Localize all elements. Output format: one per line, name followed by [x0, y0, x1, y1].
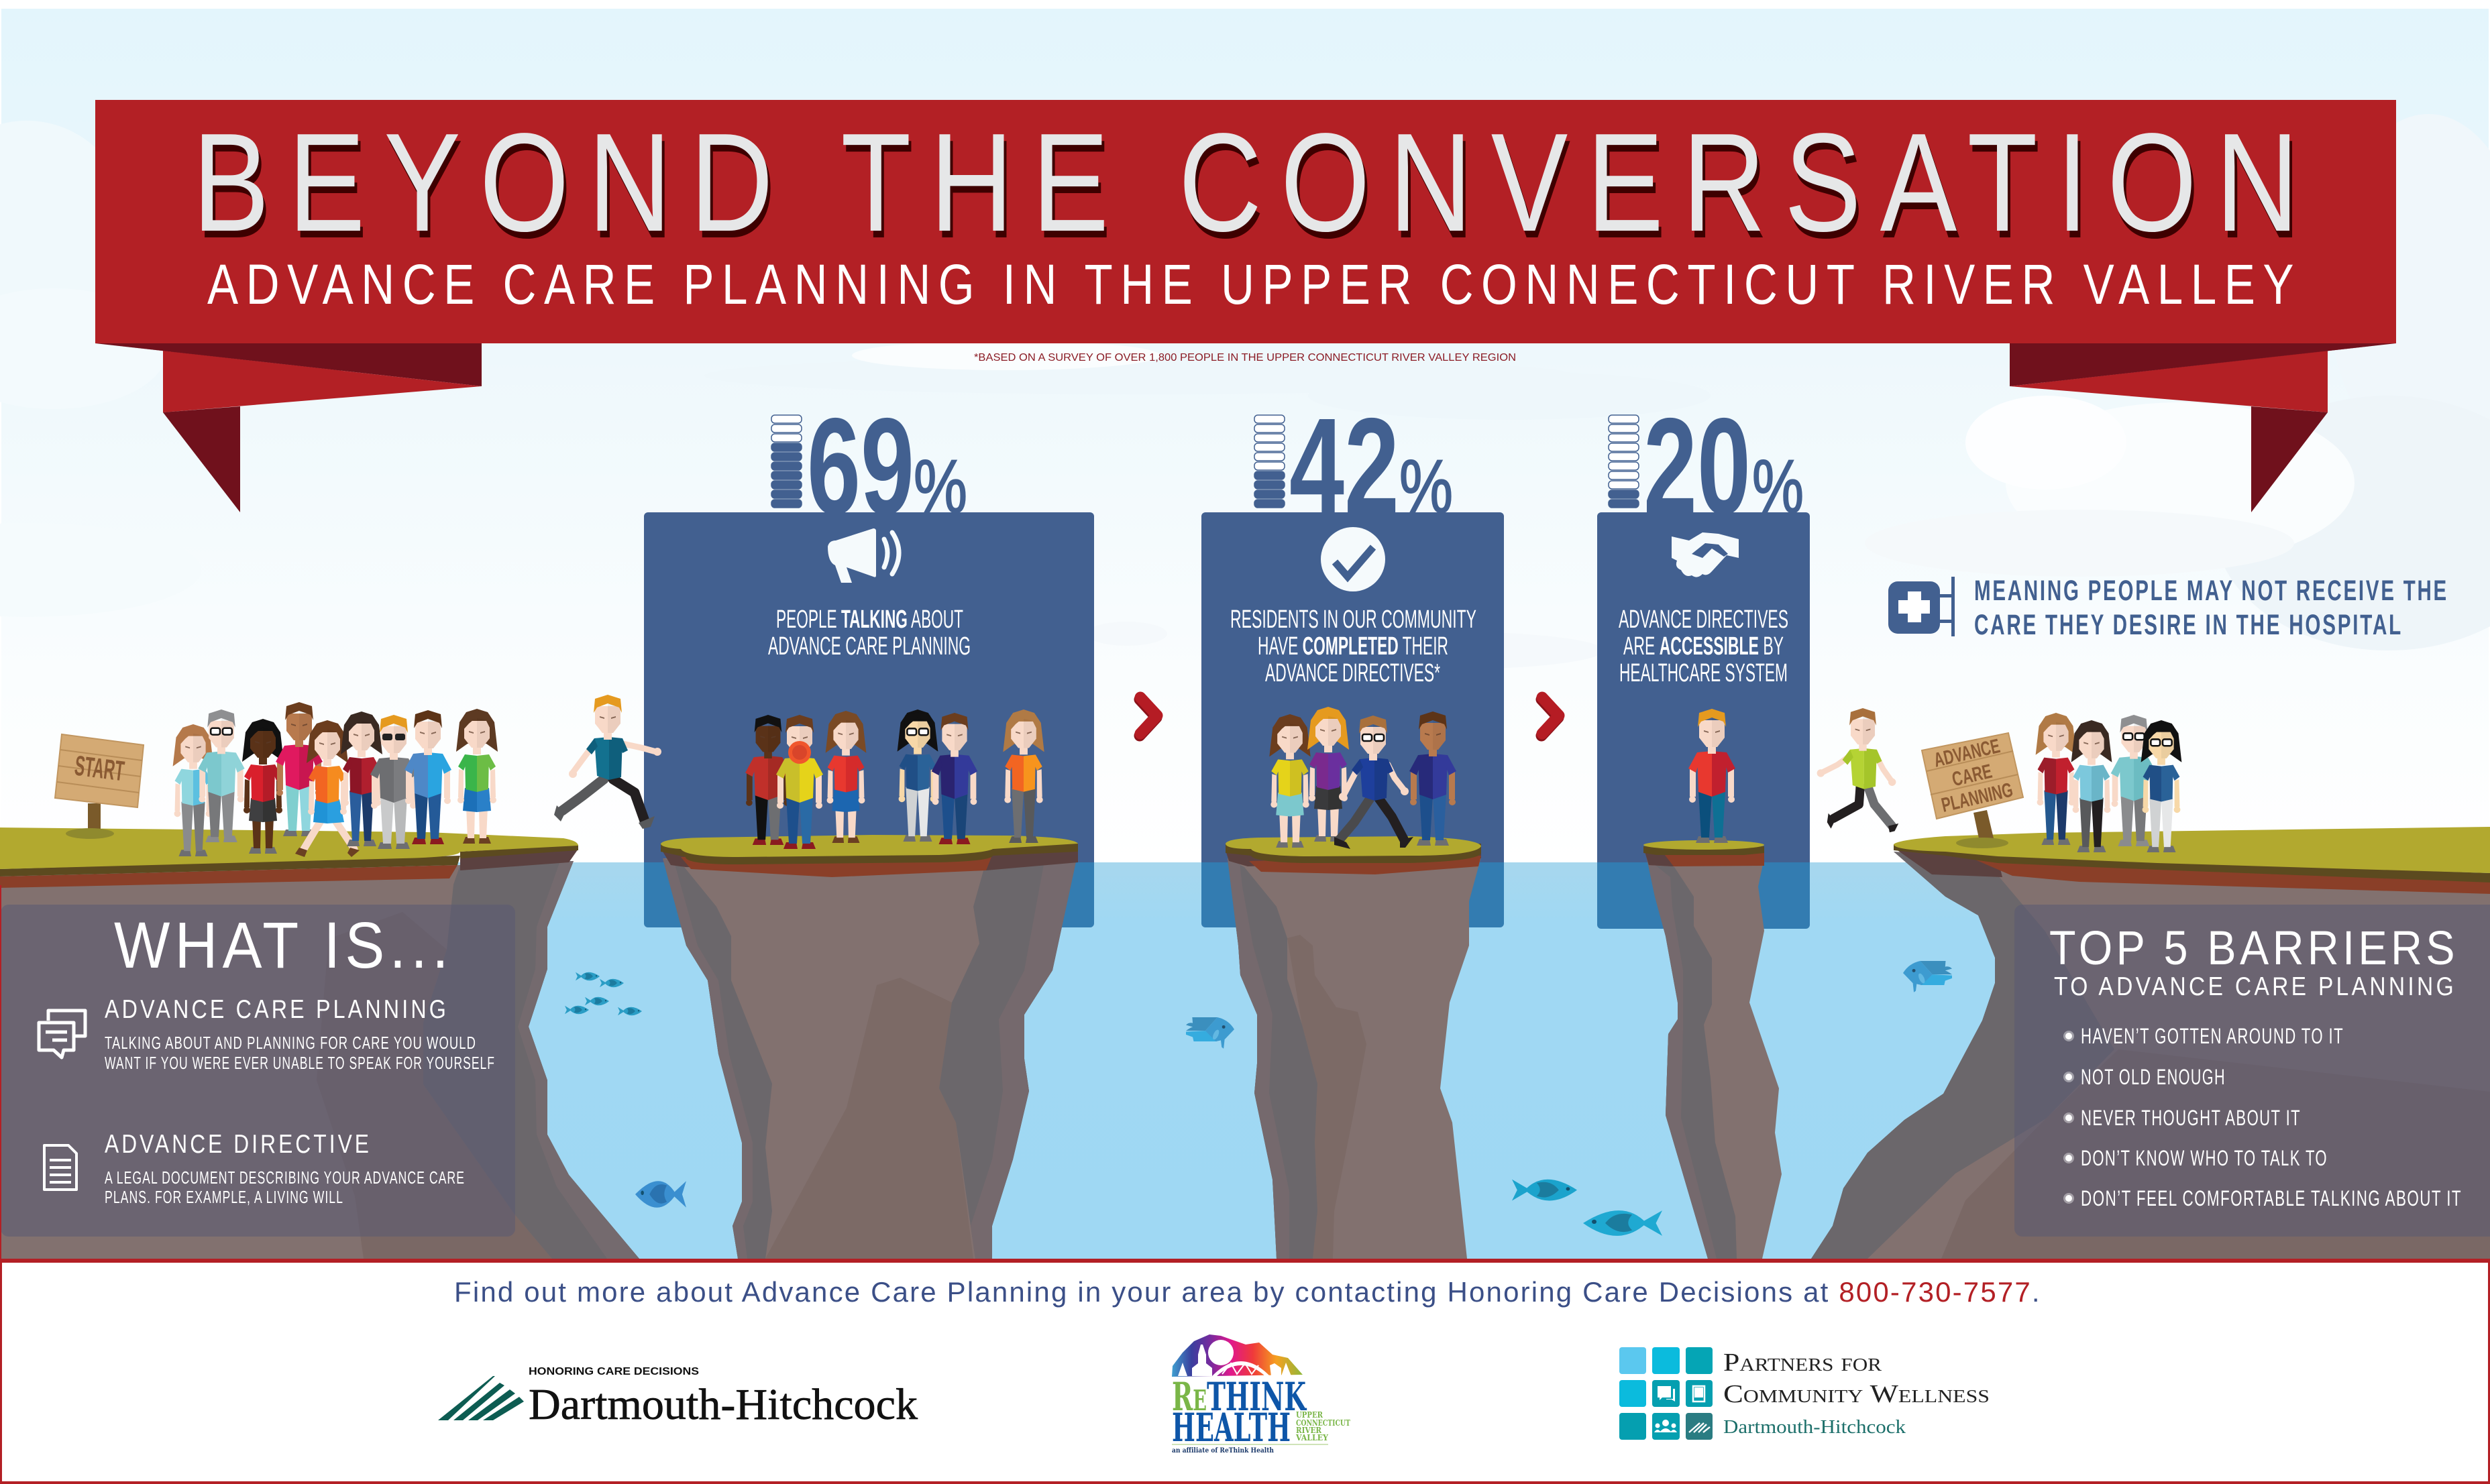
stat: 20%: %	[1752, 445, 1804, 528]
person: runner left	[554, 695, 661, 829]
panel: what is	[1, 905, 515, 1237]
sub-heading: advance directive: ADVANCE DIRECTIVE	[105, 1130, 372, 1159]
sign: start: START	[73, 750, 126, 787]
logo: Dartmouth-Hitchcock: Dartmouth-Hitchcock	[529, 1380, 918, 1429]
icon: tile grid	[1619, 1347, 1713, 1440]
banner	[95, 100, 2396, 343]
logo: Partners for Community Wellness: Dartmouth-Hitchcock	[1723, 1417, 1906, 1438]
logo: Partners for Community Wellness: Community Wellness	[1723, 1380, 1990, 1408]
stat: 69%: %	[914, 445, 967, 528]
panel: talking	[644, 512, 1094, 927]
icon: check circle	[1321, 527, 1385, 591]
people: island 1	[745, 709, 1044, 849]
right cliff	[1811, 827, 2490, 1259]
panel: accessible	[1597, 512, 1810, 929]
text: advance directive definition: A LEGAL DOCUMENT DESCRIBING YOUR ADVANCE CARE	[105, 1167, 465, 1188]
logo: ReThink Health: VALLEY	[1295, 1433, 1328, 1442]
fish: lower left-facing	[1583, 1210, 1662, 1236]
sign: start	[55, 734, 144, 839]
fish: school	[565, 972, 642, 1015]
battery gauge 20	[1609, 415, 1639, 508]
fish: right side left-facing	[1903, 961, 1952, 992]
panel: accessible: HEALTHCARE SYSTEM	[1619, 659, 1788, 687]
logo: ReThink Health: UPPER	[1296, 1410, 1323, 1420]
logo: Dartmouth-Hitchcock: HONORING CARE DECISIONS	[529, 1366, 699, 1377]
fish: blue left-facing	[635, 1181, 686, 1208]
panel: top 5 barriers	[2014, 905, 2490, 1237]
footer panel	[0, 885, 2490, 1484]
list: barriers: NOT OLD ENOUGH	[2081, 1065, 2226, 1089]
text: accessible: ADVANCE DIRECTIVES	[1619, 606, 1788, 634]
person: island 3	[1688, 709, 1735, 843]
icon: hospital sign	[1888, 577, 1955, 636]
clouds	[0, 114, 2490, 669]
banner tail left	[95, 343, 482, 512]
stat: 69%: 69	[807, 390, 914, 543]
list: barriers	[2063, 1024, 2462, 1210]
battery gauge 69	[771, 415, 802, 508]
logo: ReThink Health	[1172, 1334, 1350, 1454]
person: runner right	[1817, 708, 1898, 832]
sky background	[1, 9, 2489, 862]
panel: completed	[1201, 512, 1504, 927]
sub-heading: advance care planning: ADVANCE CARE PLANNING	[105, 995, 449, 1024]
sign: advance care planning: PLANNING	[1939, 779, 2015, 817]
left cliff	[0, 827, 639, 1259]
icon: handshake	[1672, 532, 1739, 577]
text: advance care planning definition: TALKING ABOUT AND PLANNING FOR CARE YOU WOULD	[105, 1033, 476, 1053]
logo: ReThink Health: RIVER	[1296, 1426, 1322, 1435]
fish: light blue right-facing	[946, 1155, 997, 1178]
battery gauge 42	[1254, 415, 1285, 508]
people: starting group	[173, 702, 498, 857]
panel: completed: ADVANCE DIRECTIVES*	[1265, 659, 1440, 687]
icon: megaphone	[828, 528, 899, 583]
stat: 42%: 42	[1289, 390, 1399, 543]
people: island 2	[1269, 707, 1456, 849]
icon: stripes tile	[1689, 1423, 1710, 1432]
text: people talking: PEOPLE TALKING ABOUT	[776, 606, 963, 634]
heading: what is: WHAT IS...	[114, 909, 453, 982]
list: barriers: NEVER THOUGHT ABOUT IT	[2081, 1106, 2301, 1130]
fish: lower right-facing	[1512, 1180, 1577, 1200]
sign: advance care planning: ADVANCE	[1932, 735, 2002, 772]
arrow: first chevron	[1140, 697, 1157, 736]
logo: Dartmouth-Hitchcock	[438, 1366, 918, 1429]
logo: ReThink Health: HEALTH	[1172, 1405, 1291, 1450]
stat: 20%: 20	[1643, 390, 1751, 543]
footnote: *BASED ON A SURVEY OF OVER 1,800 PEOPLE IN THE UPPER CONNECTICUT RIVER VALLEY REGION	[974, 352, 1516, 363]
icon: Dartmouth-Hitchcock mark	[438, 1376, 524, 1420]
text: residents completed: RESIDENTS IN OUR COMMUNITY	[1230, 606, 1476, 634]
arrow: second chevron	[1541, 697, 1559, 736]
logo: Partners for Community Wellness	[1619, 1347, 1990, 1440]
banner tail right	[2010, 343, 2396, 512]
sign: advance care planning	[1922, 733, 2023, 848]
stat: 42%: %	[1399, 445, 1453, 528]
logo: ReThink Health: CONNECTICUT	[1296, 1418, 1350, 1428]
panel: completed: HAVE COMPLETED THEIR	[1258, 632, 1448, 661]
island 1 rock	[661, 835, 1078, 1259]
panel: talking: ADVANCE CARE PLANNING	[768, 632, 971, 661]
logo: Partners for Community Wellness: Partners for	[1723, 1349, 1882, 1377]
list: barriers: HAVEN’T GOTTEN AROUND TO IT	[2081, 1024, 2344, 1048]
heading: top 5 barriers: TOP 5 BARRIERS	[2049, 922, 2458, 975]
church, bridge, house and trees	[1178, 1345, 1291, 1376]
sign: advance care planning: CARE	[1950, 760, 1994, 791]
icon: document	[44, 1145, 76, 1190]
callout: hospital	[1888, 575, 2448, 641]
list: barriers: DON’T KNOW WHO TO TALK TO	[2081, 1146, 2328, 1170]
fish: teal right-facing	[1186, 1017, 1234, 1049]
island 2 rock	[1226, 836, 1481, 1259]
water	[1, 862, 2489, 1261]
island 3 rock	[1643, 840, 1782, 1259]
panel: what is: PLANS. FOR EXAMPLE, A LIVING WILL	[105, 1187, 343, 1207]
panel: what is: WANT IF YOU WERE EVER UNABLE TO SPEAK FOR YOURSELF	[105, 1053, 495, 1073]
panel: accessible: ARE ACCESSIBLE BY	[1623, 632, 1784, 661]
icon: people tile	[1654, 1420, 1677, 1432]
icon: chat tile	[1658, 1386, 1675, 1402]
text: contact line: Find out more about Advance Care Planning in your area by contacting Honoring Care Decisions at 800-730-7577.	[454, 1276, 2041, 1308]
icon: book tile	[1693, 1386, 1704, 1402]
logo: ReThink Health: an affiliate of ReThink Health	[1172, 1447, 1275, 1454]
people: destination group	[2036, 713, 2181, 852]
logo: ReThink Health: RETHINK	[1172, 1374, 1307, 1420]
icon: chat bubbles	[39, 1011, 85, 1058]
